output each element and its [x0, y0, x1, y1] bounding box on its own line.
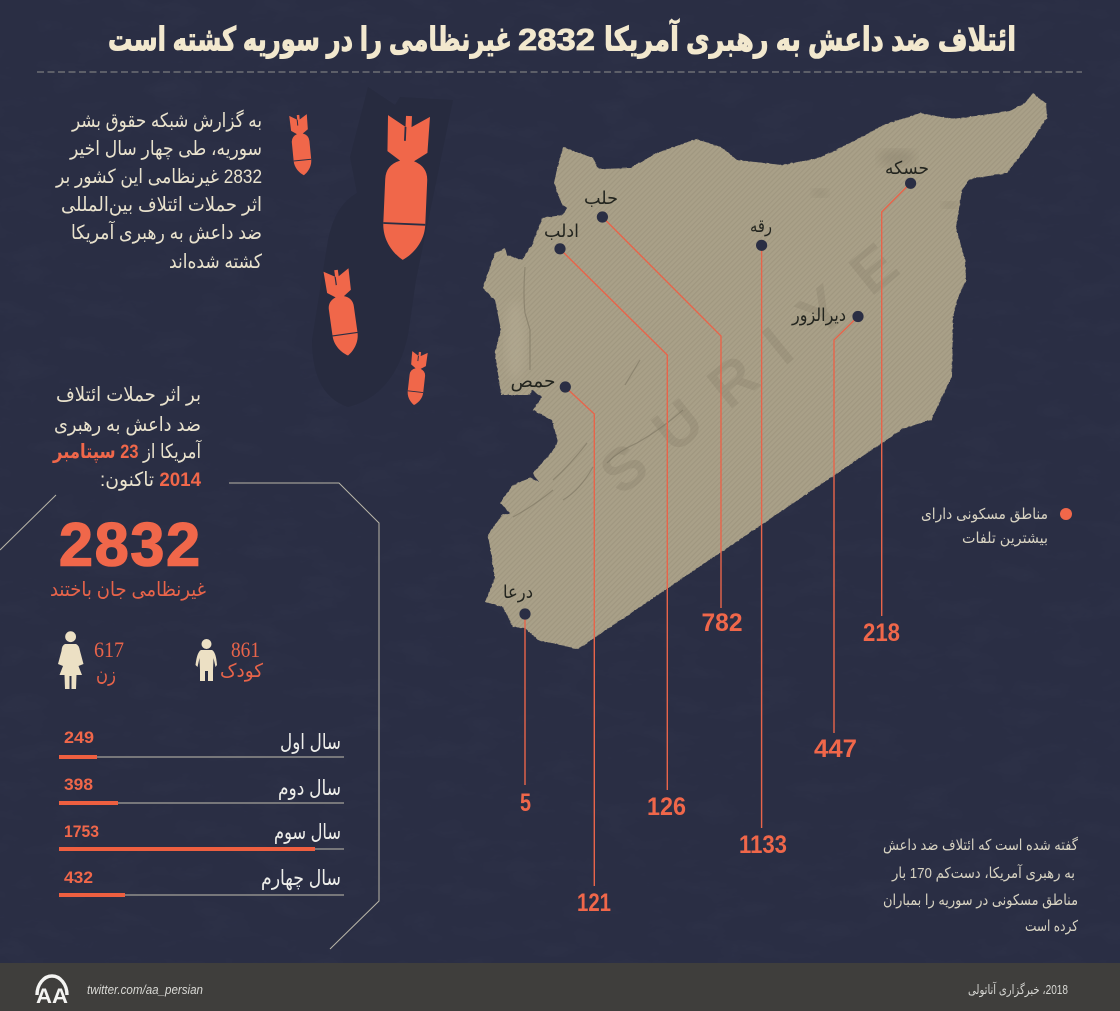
bottom note: مناطق مسکونی در سوریه را بمباران: [883, 892, 1078, 909]
intro text: [55, 109, 263, 273]
attack intro text: بر اثر حملات ائتلاف: [56, 384, 201, 406]
city totals: 218: [863, 619, 900, 647]
intro text: ضد داعش به رهبری آمریکا: [71, 220, 262, 244]
attack intro text: [52, 384, 202, 491]
intro text: 2832 غیرنظامی این کشور بر: [55, 166, 262, 188]
bottom note: گفته شده است که ائتلاف ضد داعش: [883, 836, 1079, 854]
title: غیرنظامی را در سوریه کشته است: [108, 20, 512, 60]
intro text: کشته شده‌اند: [169, 251, 263, 273]
bar: year three: سال سوم: [274, 821, 341, 844]
bar: year one: 249: [64, 728, 94, 747]
intro text: سوریه، طی چهار سال اخیر: [69, 138, 262, 160]
map watermark: SURIYE: [587, 230, 910, 507]
children count: 861: [231, 637, 260, 662]
city labels: رقه: [750, 216, 772, 236]
frame lines: [0, 483, 379, 949]
icon: AA logo: [36, 976, 68, 1008]
city totals: [520, 609, 900, 917]
bar: year two: [59, 775, 344, 805]
city labels: درعا: [503, 582, 533, 602]
title divider: [37, 71, 1082, 73]
city totals: 1133: [739, 831, 787, 859]
bar: year four: 432: [64, 868, 93, 887]
women count: زن: [96, 664, 116, 686]
attack intro text: 2014 تاکنون:: [100, 469, 201, 491]
intro text: اثر حملات ائتلاف بین‌المللی: [61, 194, 262, 216]
bar: year two: 398: [64, 775, 93, 794]
bar chart: deaths per year: [59, 728, 344, 897]
bar: year one: [59, 728, 344, 759]
bar: year three: [59, 821, 344, 851]
city labels: حمص: [510, 371, 556, 392]
attack intro text: آمریکا از 23 سپتامبر: [52, 439, 202, 463]
city labels: حسکه: [885, 158, 929, 178]
leader lines: [525, 183, 911, 886]
attack intro text: ضد داعش به رهبری: [54, 414, 201, 436]
city labels: ادلب: [544, 221, 579, 241]
footer credit: 2018، خبرگزاری آناتولی: [968, 981, 1068, 998]
footer: [0, 963, 1120, 1011]
women count: [94, 637, 124, 686]
total civilians: 2832: [59, 510, 200, 578]
bar: year three: 1753: [64, 822, 99, 841]
city labels: حلب: [584, 188, 618, 208]
children count: [220, 637, 264, 682]
intro text: به گزارش شبکه حقوق بشر: [71, 109, 262, 132]
city totals: 126: [647, 793, 686, 821]
city labels: [503, 158, 929, 602]
bar: year two: سال دوم: [278, 777, 341, 800]
city totals: 782: [702, 609, 742, 637]
bottom note: به رهبری آمریکا، دست‌کم 170 بار: [891, 864, 1075, 882]
icon: child: [196, 639, 217, 681]
women count: 617: [94, 637, 124, 662]
map of Syria: [480, 90, 1050, 655]
city totals: 5: [520, 789, 531, 817]
icon: woman: [58, 631, 84, 689]
bar: year four: سال چهارم: [261, 867, 341, 890]
city markers: [519, 178, 916, 620]
bomb shadow: [312, 87, 453, 407]
title: [108, 18, 1016, 60]
city totals: 447: [814, 735, 857, 763]
icon: small bomb top: [289, 114, 313, 176]
bar: year one: سال اول: [280, 731, 341, 754]
legend: بیشترین تلفات: [962, 530, 1048, 547]
title: 2832: [518, 22, 595, 57]
children count: کودک: [220, 661, 264, 682]
icon: medium bomb: [324, 268, 361, 357]
bar: year four: [59, 867, 344, 897]
bottom note: کرده است: [1025, 918, 1079, 935]
title: ائتلاف ضد داعش به رهبری آمریکا: [604, 18, 1016, 60]
footer twitter handle: twitter.com/aa_persian: [87, 982, 203, 997]
icon: tiny bomb: [406, 351, 428, 406]
city labels: دیرالزور: [791, 305, 846, 326]
city totals: 121: [577, 889, 611, 917]
total caption: غیرنظامی جان باختند: [50, 579, 206, 601]
icon: AA logo: AA: [36, 985, 68, 1008]
bottom note: [883, 836, 1079, 935]
legend: مناطق مسکونی دارای: [921, 506, 1048, 523]
icon: large bomb: [382, 115, 430, 261]
legend: [921, 506, 1072, 547]
